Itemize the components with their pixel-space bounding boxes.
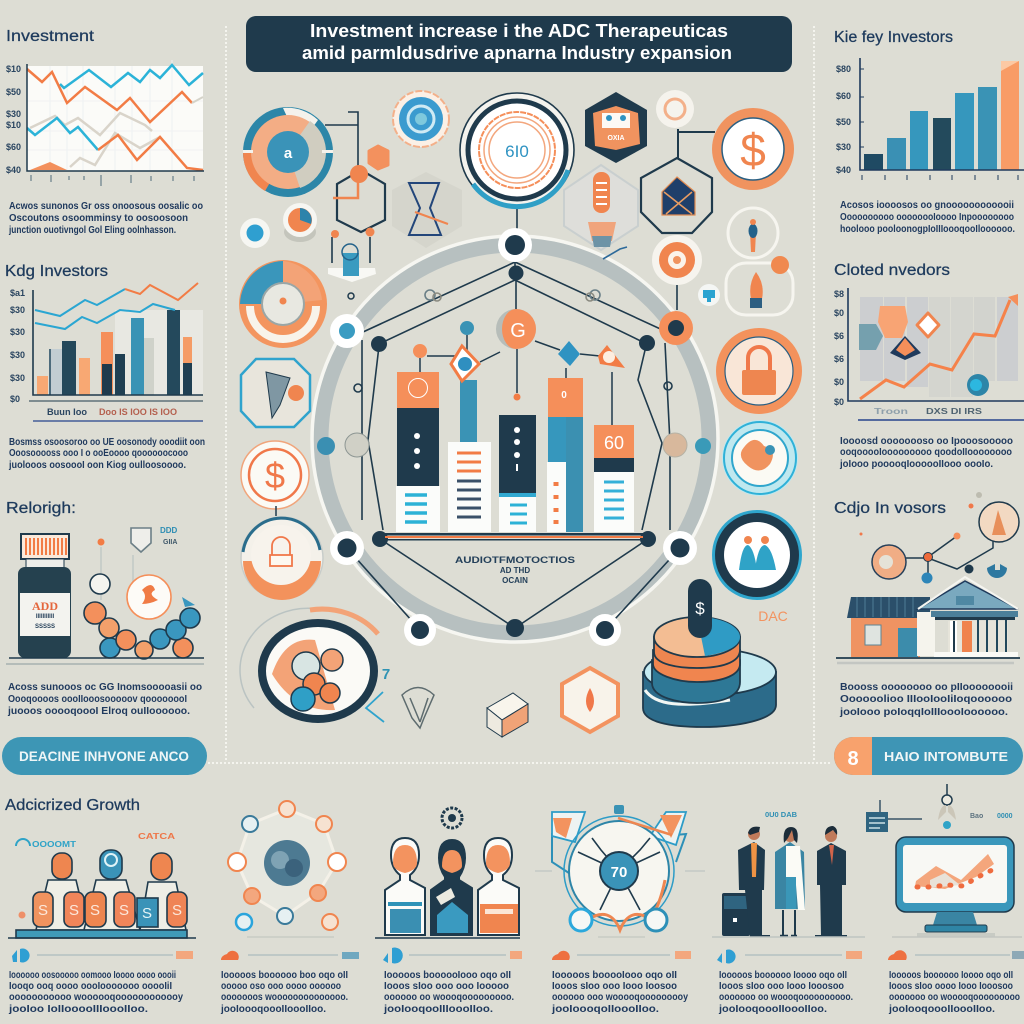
growth chart with shapes: $6	[834, 331, 844, 341]
icon: padlock circle	[241, 506, 323, 600]
description text	[8, 201, 203, 236]
heading: Kie fey Investors: Kie fey Investors	[834, 29, 953, 46]
description text	[551, 970, 688, 1015]
bar 2	[448, 380, 491, 532]
description text: Iooqo ooq oooo oooIooooooo ooooIiI	[9, 981, 172, 992]
bar chart: $80	[836, 64, 851, 74]
heading: Cale in vosors: Cdjo In vosors	[834, 500, 946, 517]
bar 5	[594, 425, 634, 532]
bar chart: $40	[836, 165, 851, 175]
icon: bottle row: CATCA	[138, 832, 175, 841]
description text: ooqooooIooooooooo qoodoIIoooooooo	[840, 447, 1012, 458]
icon: rocket in rounded frame	[726, 256, 793, 315]
description text: jooIoooqoooIIoooIIoo.	[220, 1004, 326, 1015]
combo chart: $30	[10, 350, 25, 360]
icon: monitor with chart: 0000	[997, 813, 1013, 820]
description text	[839, 436, 1013, 470]
stat row	[552, 951, 691, 960]
description text: Iooos sIoo ooo Iooo Ioosoo	[552, 981, 677, 992]
description text: junction ouotivngol Gol Eling oolnhasson.	[8, 225, 176, 236]
button: left banner	[2, 737, 207, 775]
icon: molecule chain	[6, 526, 204, 664]
button: right banner: HAIO INTOMBUTE	[884, 750, 1008, 764]
growth chart with shapes: Troon	[874, 407, 908, 416]
description text: Ioooooo oosooooo oomooo Ioooo oooo oooii	[9, 970, 176, 981]
bar 3	[499, 415, 536, 532]
chart caption: AUDIOTFMOTOCTIOS	[455, 555, 575, 566]
combo chart	[10, 283, 203, 421]
panel: relorigh ADC bottle	[2, 500, 207, 775]
description text: joIooo pooooqIoooooIIooo oooIo.	[839, 459, 993, 470]
description text: Ioooosd oooooooso oo Ipooosooooo	[840, 436, 1013, 447]
icon: large concentric circle: 6I0	[505, 142, 529, 161]
description text: jooIooqooIIIoooIIoo.	[383, 1004, 493, 1015]
column 6: monitor	[866, 784, 1024, 1015]
growth chart with shapes	[834, 288, 1024, 420]
icon: parcel box	[487, 693, 528, 737]
bar 1	[396, 372, 440, 532]
line chart: $60	[6, 142, 21, 152]
description text: Iooooos boooooIooo oqo oII	[384, 970, 511, 981]
growth chart with shapes: $0	[834, 308, 844, 318]
icon: team and suitcase: 0U0 DAB	[765, 810, 798, 819]
inner network lines	[347, 208, 680, 630]
icon: dollar badge left: $	[265, 455, 285, 496]
line chart: $10	[6, 120, 21, 130]
button: right banner: 8	[847, 748, 859, 770]
combo chart: $30	[10, 305, 25, 315]
icon: team and suitcase	[712, 810, 865, 937]
bar chart	[836, 58, 1024, 180]
description text: Oscoutons osoomminsy to oosoosoon	[9, 213, 188, 224]
bar 5: 60	[604, 433, 624, 453]
bar 4	[547, 378, 583, 532]
icon: coin stack: $	[695, 599, 705, 618]
icon: curved link	[603, 247, 627, 259]
icon: hub wheel	[535, 805, 705, 937]
chart caption: OCAIN	[502, 576, 528, 585]
icon: bottle row: S	[119, 902, 129, 919]
network icons	[860, 492, 1019, 584]
icon: lower left donut	[239, 260, 327, 348]
icon: coin stack	[643, 579, 776, 727]
description text	[718, 970, 853, 1015]
panel: cale investors buildings	[834, 492, 1023, 775]
description text: Oooqoooos oooIIooosooooov qoooooooI	[8, 694, 187, 705]
icon: outlined hexagon	[333, 165, 385, 232]
description text: Acosos ioooosos oo gnoooooooooooii	[840, 200, 1014, 211]
icon: bottle row: S	[69, 902, 79, 919]
icon: octagon shield	[241, 359, 310, 427]
description text	[888, 970, 1020, 1015]
icon: bottle row: S	[90, 902, 100, 919]
description text: Oooooolioo IIIooIooIiIoqoooooo	[840, 694, 1012, 705]
icon: blue and orange donut	[243, 107, 333, 197]
bar chart: $50	[836, 117, 851, 127]
combo chart: Buun Ioo	[47, 407, 88, 417]
icon: bottle row: S	[172, 902, 182, 919]
title banner: Investment increase i the ADC Therapeuticas	[310, 21, 728, 41]
stat row	[888, 950, 1024, 960]
growth chart with shapes: DXS DI IRS	[926, 407, 983, 416]
heading: Cloted nvedors: Cloted nvedors	[834, 262, 950, 279]
outer ring	[312, 236, 718, 642]
icon: padlock badge	[716, 328, 802, 414]
icon: network wheel	[228, 801, 346, 937]
stat row	[12, 948, 193, 962]
combo chart: $0	[10, 394, 20, 404]
bar chart: $60	[836, 91, 851, 101]
icon: dollar coin: $	[740, 124, 766, 176]
icon: stand with blue flask	[328, 228, 376, 299]
icon: ADC bottle: IIIIIIIIIII	[36, 614, 54, 620]
growth chart with shapes: $0	[834, 397, 844, 407]
growth chart with shapes: $6	[834, 354, 844, 364]
label: DAC: DAC	[758, 608, 788, 624]
heading: Investment: Investment	[6, 28, 95, 45]
combo chart: $30	[10, 327, 25, 337]
combo chart: Doo IS IOO IS IOO	[99, 407, 177, 417]
panel: right key investors bar chart	[834, 29, 1024, 235]
panel: central hub diagram	[312, 208, 718, 646]
icon: molecule circle: 7	[382, 666, 390, 683]
icon: house and bank	[836, 577, 1020, 663]
connector icons above the bars: G	[510, 320, 526, 342]
icon: pale figure	[402, 688, 434, 728]
description text	[383, 970, 514, 1015]
title banner	[246, 16, 792, 72]
line chart: $30	[6, 109, 21, 119]
line chart: $50	[6, 87, 21, 97]
panel: key investors combo chart	[5, 263, 205, 471]
icon: orange badge	[369, 146, 388, 169]
description text: Ooosooooss ooo I o ooEoooo qoooooocooo	[9, 448, 188, 459]
description text: jooIooqoooIIoooIIoo.	[888, 1004, 995, 1015]
description text: oooooo oo woooqooooooooo.	[384, 992, 514, 1003]
icon: pale hexagon with hourglass	[392, 172, 462, 248]
connector icons above the bars	[413, 309, 625, 425]
column 2: network wheel	[220, 801, 359, 1015]
description text: jooIooqoooIIoooIIoo.	[718, 1004, 827, 1015]
description text: jooIooo poIoqqIoIIIoooIoooooo.	[839, 707, 1008, 718]
icon: three people	[375, 808, 520, 938]
icon: orange hexagon	[562, 668, 618, 732]
icon: blue mandala	[393, 91, 449, 147]
icon: molecule chain: GIIA	[163, 539, 177, 546]
column 3: three people	[375, 808, 522, 1015]
icon: pale hexagon with capsule	[564, 165, 638, 250]
icon: dark hexagon with tag: OXIA	[607, 135, 625, 142]
description text: Acoss sunooos oc GG Inomsooooasii oo	[8, 682, 202, 693]
description text: Iooooos boooooo boo oqo oII	[221, 970, 348, 981]
icon: orange target	[652, 235, 702, 285]
heading: Adcicrized Growth: Adcicrized Growth	[5, 797, 140, 814]
stat row	[383, 948, 522, 964]
icon: figure in white ring	[728, 208, 778, 258]
central bar chart	[380, 372, 648, 540]
description text	[7, 682, 202, 717]
combo chart: $a1	[10, 288, 25, 298]
icon: dark hexagon with tag	[585, 92, 647, 163]
line chart: $40	[6, 165, 21, 175]
icon: blue and orange donut: a	[284, 145, 293, 162]
chart caption	[455, 555, 575, 585]
icon: bottle row: S	[142, 905, 152, 922]
icon: ADC bottle: ADD	[32, 599, 58, 613]
description text: ooooo oso ooo oooo oooooo	[221, 981, 341, 992]
icon: bottle row	[8, 832, 196, 938]
heading: Relorigh: Relorigh:	[6, 500, 76, 517]
description text: jooIoooqoIIoooIIoo.	[551, 1004, 659, 1015]
bar chart: $30	[836, 142, 851, 152]
button: right banner	[834, 737, 1023, 775]
growth chart with shapes: $8	[834, 289, 844, 299]
description text: ooooooo oo woooqoooooooooo.	[719, 992, 853, 1003]
description text	[839, 682, 1013, 718]
description text: Iooooos booooIooo oqo oII	[552, 970, 677, 981]
icon: ADC bottle	[18, 534, 71, 658]
description text	[220, 970, 348, 1015]
description text	[840, 200, 1015, 235]
icon: outlined octagon with house	[641, 158, 712, 233]
connector lines	[325, 112, 358, 174]
chart caption: AD THD	[500, 566, 530, 575]
icon: monitor with chart	[866, 784, 1022, 937]
description text: juolooos oosoooI oon Kiog oulloosoooo.	[8, 460, 186, 471]
icon: bottle row: OOOOMT	[32, 840, 76, 849]
icon: molecule chain: DDD	[160, 526, 178, 535]
column 1: bottles	[8, 832, 196, 1015]
icon: ADC bottle: SSSSS	[35, 624, 55, 630]
stat row	[717, 950, 862, 964]
bar 4: 0	[561, 390, 567, 401]
description text	[8, 437, 205, 471]
column 5: team of people	[712, 810, 865, 1015]
chart baseline	[380, 533, 648, 540]
icon: petri dish circle	[722, 420, 798, 496]
combo chart: $30	[10, 373, 25, 383]
connector lines	[678, 129, 715, 158]
panel: investment line chart	[6, 28, 204, 236]
icon: molecule circle	[240, 608, 390, 722]
stat row	[221, 951, 359, 960]
growth chart with shapes: $0	[834, 377, 844, 387]
description text: Acwos sunonos Gr oss onoosous oosalic oo	[9, 201, 203, 212]
icon: monitor with chart: Bao	[970, 813, 983, 820]
icon: dollar coin	[712, 108, 794, 190]
line chart: $10	[6, 64, 21, 74]
icon: people circle	[712, 510, 802, 600]
title banner: amid parmIdusdrive apnarna Industry expansion	[302, 43, 732, 63]
description text	[8, 970, 183, 1015]
description text: Bosmss osoosoroo oo UE oosonody ooodiit oon	[9, 437, 205, 448]
description text: Iooooos boooooo Ioooo oqo oII	[719, 970, 847, 981]
icon: two white circles	[240, 203, 317, 248]
icon: small blue badge	[698, 284, 720, 306]
icon: large concentric circle	[460, 93, 574, 207]
description text: juooos ooooqoooI Elroq ouIIoooooo.	[7, 706, 190, 717]
line chart	[6, 60, 204, 186]
column 4: hub wheel	[535, 805, 705, 1015]
description text: Iooos sIoo ooo ooo Iooooo	[384, 981, 509, 992]
description text: Boooss oooooooo oo pIIoooooooii	[840, 682, 1013, 693]
button: left banner: DEACINE INHVONE ANCO	[19, 749, 189, 764]
panel: upper and side icons around the hub	[239, 90, 802, 737]
icon: hub wheel: 70	[611, 864, 627, 881]
icon: bottle row: S	[38, 902, 48, 919]
description text: jooIoo IoIIooooIIIoooIIoo.	[8, 1004, 148, 1015]
panel: cloted investors chart	[834, 262, 1024, 470]
description text: ooooooos woooooooooooooo.	[221, 992, 348, 1003]
heading: Kdg Investors: Kdg Investors	[5, 263, 108, 280]
icon: dollar badge left	[241, 441, 309, 509]
icon: small white face circle	[656, 90, 694, 128]
description text: Iooos sIoo ooo Iooo Iooosoo	[719, 981, 844, 992]
description text: ooooooooooo woooooqoooooooooooy	[9, 992, 183, 1003]
description text: oooooo ooo wooooqooooooooy	[552, 992, 688, 1003]
network nodes	[317, 228, 711, 646]
